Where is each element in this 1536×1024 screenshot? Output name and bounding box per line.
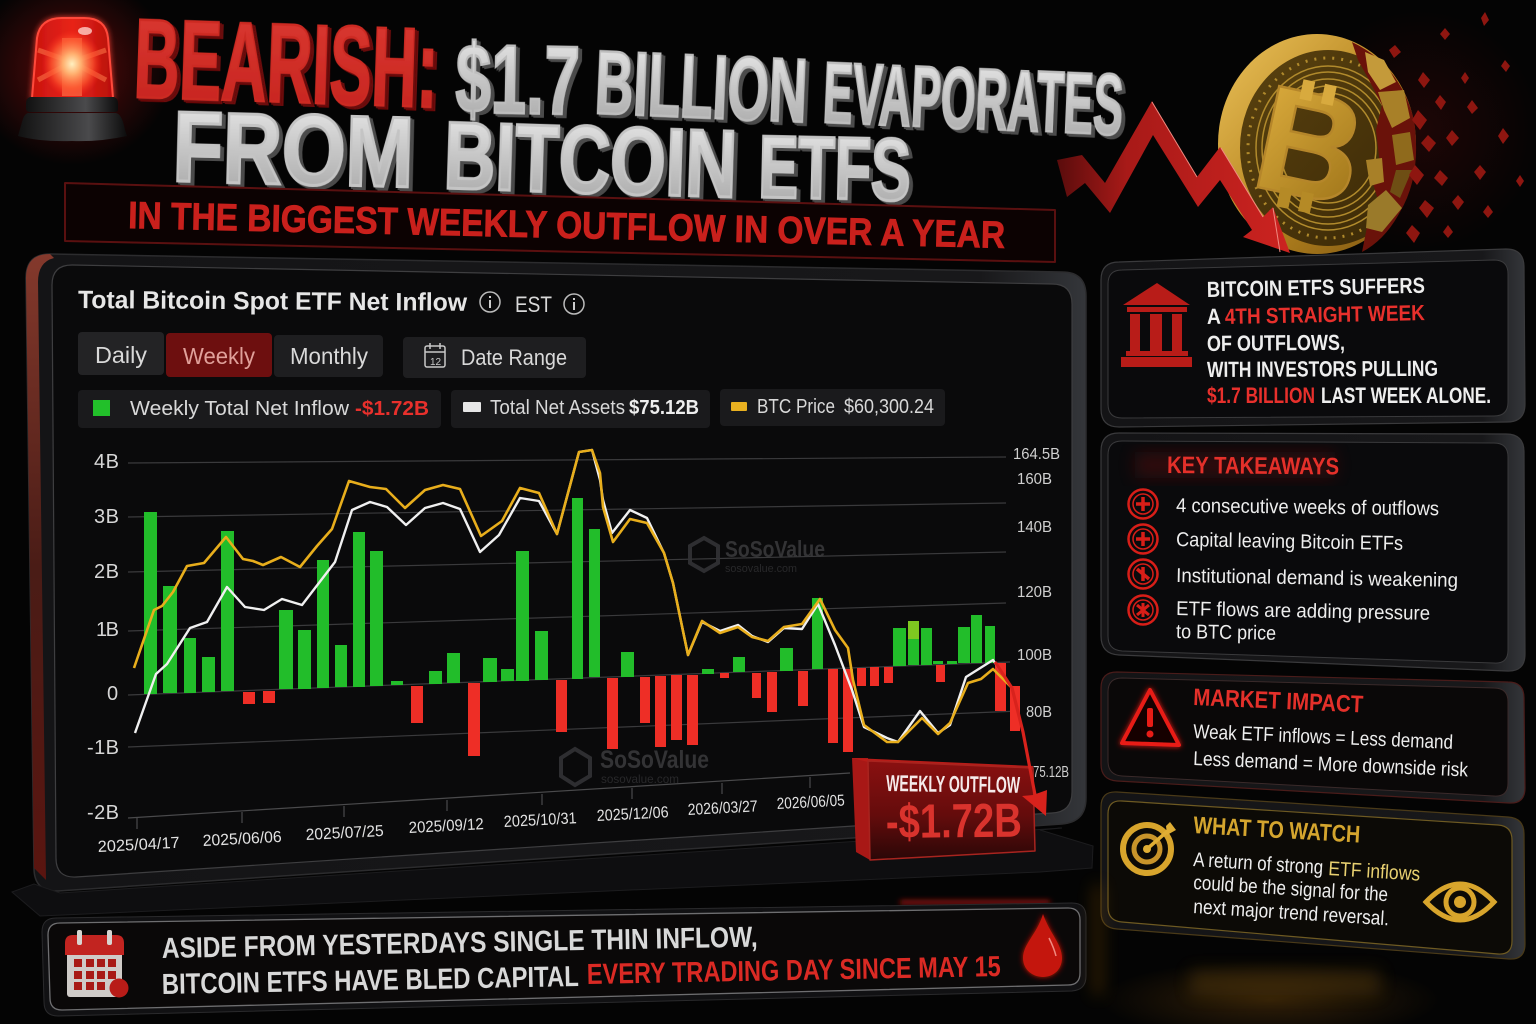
icon: bank: [1121, 283, 1192, 367]
watch text: could be the signal for the: [1193, 872, 1389, 906]
watch text: A return of strong: [1193, 849, 1324, 879]
right axis labels: 164.5B: [1013, 446, 1060, 463]
icon: info: [564, 294, 584, 314]
icon: red siren: [18, 18, 127, 141]
right axis labels: 140B: [1017, 519, 1052, 536]
date axis labels: 2026/06/05: [776, 792, 845, 813]
left axis labels: 4B: [94, 451, 119, 473]
right axis labels: 160B: [1017, 471, 1052, 488]
title word: etfs: ETFS: [758, 117, 912, 219]
takeaway four: [1128, 596, 1430, 645]
takeaway one: [1128, 490, 1439, 520]
legend: net assets: Total Net Assets: [490, 397, 625, 419]
bar and line chart: [87, 446, 1069, 856]
legend: [78, 389, 945, 428]
icon: info: [480, 292, 500, 312]
tab: daily: Daily: [95, 342, 148, 368]
banner line two: BITCOIN ETFS HAVE BLED CAPITAL: [162, 961, 579, 1001]
green bars: [144, 498, 995, 694]
takeaway two: Capital leaving Bitcoin ETFs: [1176, 529, 1403, 555]
title line one: [132, 0, 1125, 154]
floor reflection: [1094, 885, 1380, 995]
icon: target: [1123, 822, 1176, 873]
legend: BTC price: BTC Price: [757, 396, 835, 418]
right axis labels: 75.12B: [1033, 764, 1069, 781]
decorative coin fragments: [1389, 12, 1524, 243]
summary text: [1207, 273, 1491, 408]
watch text: ETF inflows: [1328, 858, 1421, 886]
icon: warning triangle: [1122, 690, 1179, 745]
takeaway two: [1128, 524, 1403, 555]
banner line one: ASIDE FROM YESTERDAYS SINGLE THIN INFLOW,: [162, 922, 758, 965]
watch text: next major trend reversal.: [1193, 896, 1390, 930]
takeaway one: 4 consecutive weeks of outflows: [1176, 495, 1439, 520]
heading: KEY TAKEAWAYS: [1167, 452, 1339, 481]
right axis labels: 80B: [1026, 704, 1052, 721]
icon: calendar: 12: [430, 357, 442, 368]
red bars: [243, 663, 1020, 756]
panel: key takeaways: [1101, 433, 1525, 671]
tab: daily: [78, 332, 164, 375]
left axis labels: 2B: [94, 561, 119, 583]
watermark: SoSoValue lower: SoSoValue: [600, 746, 709, 774]
legend: weekly net inflow: Weekly Total Net Inflow: [130, 398, 350, 420]
yellow line: BTC price: [134, 450, 1012, 742]
left axis labels: 0: [107, 683, 118, 705]
left axis labels: -2B: [87, 802, 119, 824]
timezone label: EST: [515, 292, 552, 317]
tab: weekly: [166, 333, 272, 377]
title word: BEARISH: BEARISH:: [132, 0, 440, 131]
banner line two highlight: EVERY TRADING DAY SINCE MAY 15: [587, 951, 1001, 991]
date axis labels: [97, 792, 845, 856]
summary text: OF OUTFLOWS,: [1207, 330, 1345, 356]
title word: from: FROM: [171, 91, 415, 209]
icon: cracked bitcoin coin: B: [1242, 52, 1378, 238]
right axis labels: 120B: [1017, 584, 1052, 601]
legend: weekly net inflow: [78, 390, 441, 428]
title word: evaporates: EVAPORATES: [821, 45, 1125, 154]
heading glow: [1135, 452, 1335, 478]
subtitle banner: [65, 183, 1055, 262]
legend: weekly net inflow: -$1.72B: [355, 398, 429, 420]
date axis labels: 2025/04/17: [97, 835, 180, 856]
watermark: SoSoValue upper: [690, 536, 825, 575]
panel: chart: [26, 254, 1086, 891]
period tabs: [78, 332, 586, 378]
icon: blood drop: [1023, 914, 1062, 977]
date axis labels: 2025/10/31: [503, 810, 577, 831]
icon: calendar: [425, 343, 445, 368]
summary text: LAST WEEK ALONE.: [1321, 383, 1491, 408]
summary text: WITH INVESTORS PULLING: [1207, 356, 1438, 382]
tab: monthly: [274, 335, 383, 377]
panel: what to watch: [1101, 792, 1525, 959]
summary text: BITCOIN ETFS SUFFERS: [1207, 273, 1425, 302]
legend: BTC price: [720, 389, 945, 426]
date axis labels: 2025/12/06: [596, 804, 669, 825]
legend: net assets: $75.12B: [629, 397, 699, 419]
date axis labels: 2025/07/25: [305, 823, 384, 844]
takeaway three: [1128, 560, 1458, 592]
icon: calendar: [65, 930, 128, 998]
coin crumbling edge: [1352, 42, 1416, 252]
title word: billion: BILLION: [593, 33, 809, 142]
panel: bottom banner: [42, 901, 1086, 1016]
right axis labels: [1013, 446, 1069, 781]
date axis labels: 2025/09/12: [408, 816, 484, 837]
panel: straight week summary: [1101, 249, 1525, 427]
takeaway three: Institutional demand is weakening: [1176, 565, 1458, 592]
right axis labels: 100B: [1017, 647, 1052, 664]
watermark: SoSoValue lower: [561, 746, 709, 786]
impact text: Less demand = More downside risk: [1193, 748, 1469, 782]
platform under chart: [12, 828, 1093, 916]
impact text: Weak ETF inflows = Less demand: [1193, 721, 1453, 754]
takeaway four: to BTC price: [1176, 621, 1276, 645]
tab: monthly: Monthly: [290, 343, 368, 369]
summary text: 4TH STRAIGHT WEEK: [1225, 300, 1425, 329]
left axis labels: [87, 451, 119, 824]
title line two: [171, 91, 912, 219]
title word: amount: $1.7: [455, 24, 581, 135]
callout value: -$1.72B: [886, 795, 1022, 849]
icon: cracked bitcoin coin: [1218, 34, 1416, 254]
watermark: SoSoValue upper: sosovalue.com: [725, 563, 797, 575]
left axis labels: 3B: [94, 506, 119, 528]
title word: bitcoin: BITCOIN: [442, 102, 739, 218]
white line: total net assets: [135, 450, 1012, 742]
chart heading: Total Bitcoin Spot ETF Net Inflow: [78, 286, 468, 317]
date range button: Date Range: [461, 345, 567, 370]
watermark: SoSoValue lower: sosovalue.com: [601, 772, 679, 786]
legend: net assets: [451, 390, 710, 428]
callout label: WEEKLY OUTFLOW: [886, 770, 1020, 798]
date axis labels: 2025/06/06: [202, 829, 282, 850]
left axis labels: 1B: [96, 619, 119, 641]
arrow: red falling zigzag: [1057, 101, 1290, 253]
left axis labels: -1B: [87, 737, 119, 759]
callout: weekly outflow: [852, 758, 1035, 860]
tab: weekly: Weekly: [183, 343, 255, 369]
impact text: [1193, 721, 1469, 782]
date range button: [403, 337, 586, 378]
takeaway four: ETF flows are adding pressure: [1176, 598, 1430, 625]
watermark: SoSoValue upper: SoSoValue: [725, 536, 825, 562]
legend: BTC price: $60,300.24: [844, 396, 934, 418]
grid lines: [128, 457, 1020, 829]
heading: MARKET IMPACT: [1193, 684, 1364, 718]
panel: market impact: [1101, 672, 1525, 803]
summary text: $1.7 BILLION: [1207, 383, 1315, 408]
summary text: A: [1207, 304, 1221, 329]
watch text: [1193, 849, 1421, 930]
heading: WHAT TO WATCH: [1193, 812, 1361, 849]
icon: eye: [1426, 884, 1494, 920]
subtitle text: IN THE BIGGEST WEEKLY OUTFLOW IN OVER A YEAR: [128, 195, 1006, 257]
arrow: outflow pointer: [995, 662, 1047, 816]
date axis labels: 2026/03/27: [687, 798, 758, 819]
